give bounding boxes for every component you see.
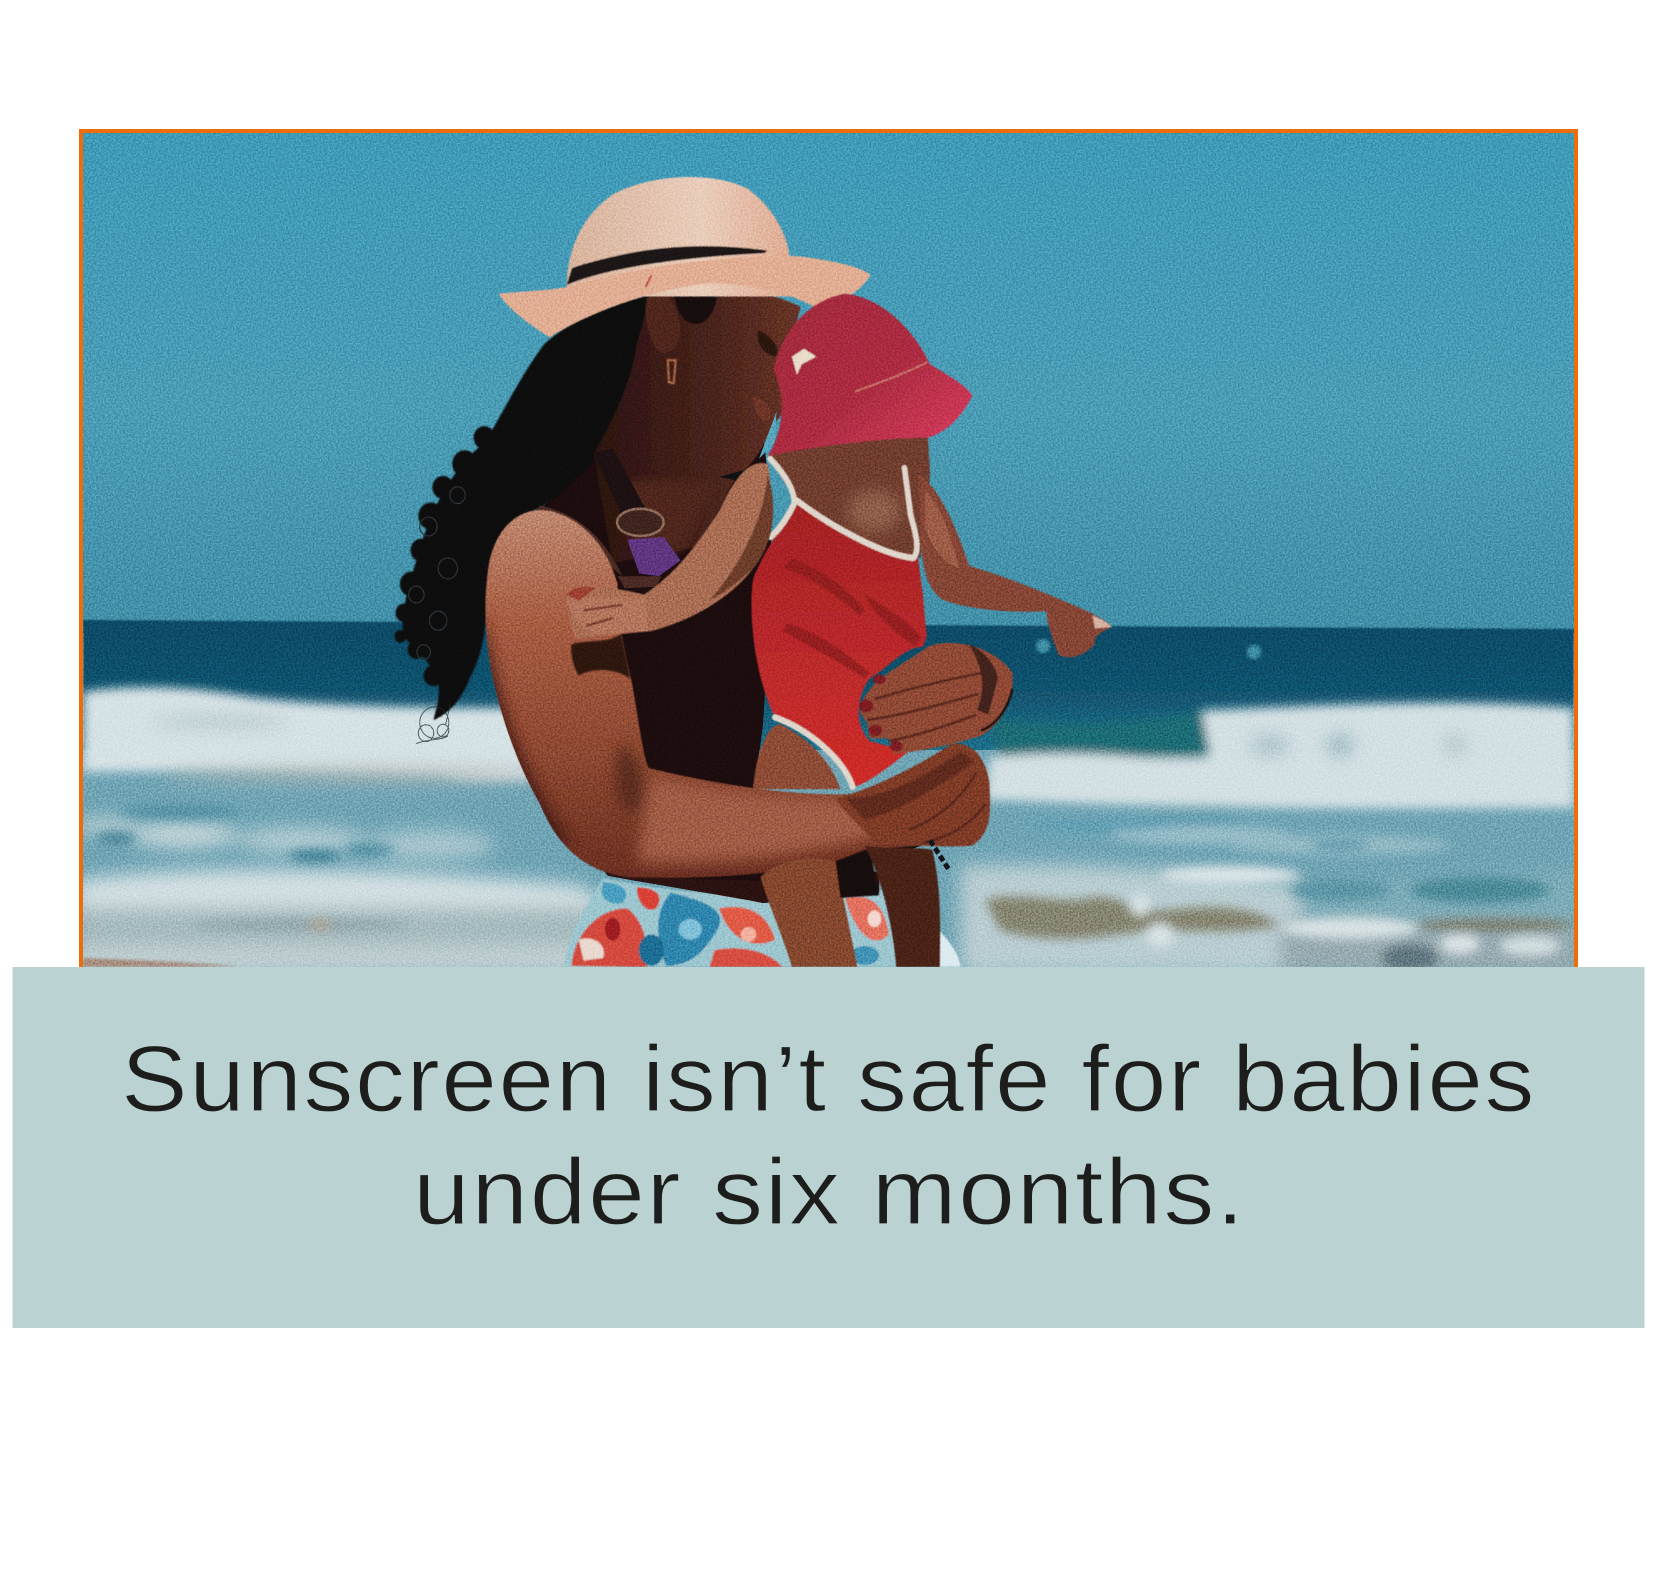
deep sea band — [83, 620, 1574, 760]
swimsuit folds — [782, 558, 920, 678]
baby's left arm and hand — [567, 463, 773, 639]
caption line 2: under six months. — [413, 1139, 1246, 1244]
caption background — [12, 967, 1644, 1328]
curl highlights — [409, 487, 465, 659]
baby's right arm and hand — [918, 474, 1112, 657]
bracelet at mother's wrist — [930, 840, 950, 871]
mother's neck and face — [593, 284, 801, 563]
film grain — [83, 133, 1574, 967]
baby's legs — [753, 725, 940, 967]
highlight on baby's back — [848, 490, 901, 532]
brown wet sand patches — [985, 896, 1280, 939]
sun hat — [499, 177, 871, 337]
sky gap by the chin — [759, 412, 776, 459]
mother's upper hand on the baby — [859, 643, 1013, 754]
specks in sea — [1247, 645, 1261, 659]
mother's strap — [535, 506, 622, 576]
sky — [83, 133, 1574, 633]
waistband — [603, 869, 879, 903]
foam shadows — [150, 716, 1465, 781]
soft water masses — [73, 818, 1580, 975]
green wave — [990, 712, 1208, 758]
left foam — [83, 687, 640, 781]
loose hair wisp — [416, 704, 450, 744]
dark backing of the mother's chest and torso — [544, 442, 923, 880]
shallow water base — [83, 750, 1574, 970]
hand shadow on the arm — [571, 634, 630, 678]
dark ripples left — [96, 833, 136, 843]
baby's swimsuit — [752, 459, 927, 787]
right foam — [985, 703, 1574, 808]
photo: mother and baby on the beach — [73, 131, 1580, 991]
fingernails — [859, 675, 903, 751]
orange photo border — [81, 131, 1576, 991]
right water — [1110, 826, 1290, 844]
arm shading clipped to the arm — [481, 610, 879, 863]
surf — [83, 687, 1575, 972]
white trim of swimsuit — [770, 459, 917, 787]
mother's arm — [485, 510, 988, 878]
mother's lower hand — [836, 743, 990, 846]
shorts — [564, 878, 961, 967]
infographic canvas — [12, 129, 1644, 1328]
caption panel — [12, 967, 1644, 1328]
sand strip — [83, 958, 240, 967]
baby's bucket hat — [768, 294, 972, 456]
baby's back — [768, 425, 930, 558]
necklace and purple top — [593, 448, 681, 588]
figures drawn in zoom-space coordinates — [395, 177, 1112, 967]
caption line 1: Sunscreen isn’t safe for babies — [121, 1026, 1536, 1131]
hair with curly outline — [394, 296, 648, 721]
